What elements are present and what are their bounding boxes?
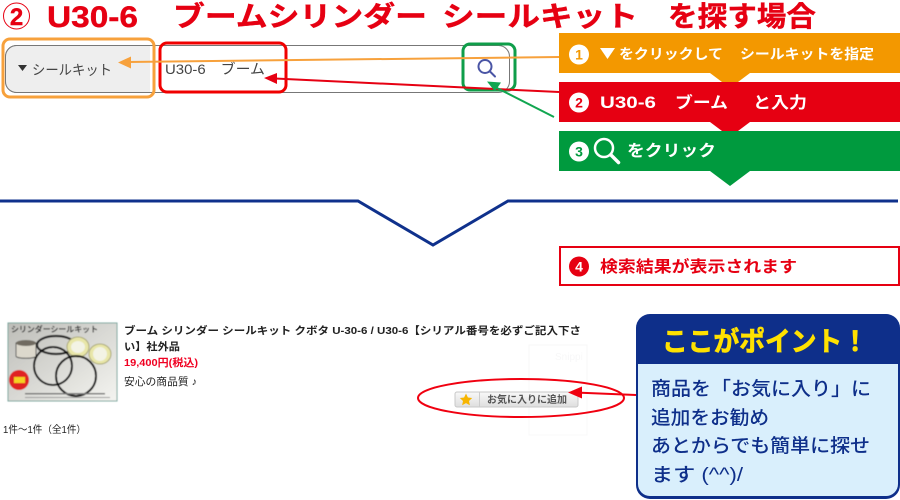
result count: 1件～1件（全1件） <box>3 423 86 436</box>
highlight: category box <box>3 39 154 97</box>
panel body text: ます (^^)/ <box>651 465 744 486</box>
step 1 banner: をクリックして <box>619 46 723 62</box>
product listing text: い】社外品 <box>124 340 180 353</box>
faint snipping tool ghost <box>529 345 587 435</box>
step 2 banner: 2 <box>575 94 583 110</box>
step 2 banner: と入力 <box>753 94 807 112</box>
price: 19,400円(税込) <box>124 356 198 369</box>
step 3 banner: をクリック <box>627 142 716 160</box>
faint snipping tool ghost: Snippi <box>555 352 583 363</box>
icon: magnifier <box>595 139 618 162</box>
panel heading: ここがポイント！ <box>662 326 868 357</box>
step 3 banner <box>559 131 900 186</box>
step 1 banner: 1 <box>575 46 583 62</box>
highlight: favorite button ellipse <box>418 379 624 417</box>
arrow: point panel to favorite button <box>568 386 636 398</box>
step 2 banner: ブーム <box>675 93 728 112</box>
highlight: search button box <box>463 44 515 90</box>
highlight: keyword box <box>160 43 286 92</box>
step 4 result banner <box>560 247 899 285</box>
product listing text <box>3 324 581 436</box>
title: U30-6 <box>47 1 138 34</box>
panel body text: 追加をお勧め <box>651 407 769 429</box>
title: ブームシリンダー <box>173 0 427 32</box>
product photo: シリンダーシールキット <box>11 324 98 334</box>
product name: ブーム シリンダー シールキット クボタ U-30-6 / U30-6【シリアル番号を必ずご記入下さ <box>124 324 581 337</box>
search button icon <box>478 60 495 76</box>
step 3 banner: 3 <box>575 144 583 160</box>
product photo <box>8 323 117 401</box>
arrow: step 1 to category <box>118 56 559 68</box>
panel: point callout <box>636 314 900 499</box>
title: を探す場合 <box>668 1 816 32</box>
arrow: step 2 to keyword <box>264 73 559 92</box>
step 2 banner: U30-6 <box>600 93 656 112</box>
title <box>4 0 816 34</box>
panel body text <box>651 378 871 486</box>
search bar <box>6 46 510 92</box>
panel body text: 商品を「お気に入り」に <box>651 378 871 400</box>
divider with downward chevron <box>0 201 898 245</box>
arrow: step 3 to search button <box>487 82 554 117</box>
panel body text: あとからでも簡単に探せ <box>651 435 870 457</box>
step 1 banner: シールキットを指定 <box>740 46 874 62</box>
title: 2 <box>10 4 23 31</box>
step 4 result banner: 検索結果が表示されます <box>600 257 797 276</box>
step 4 result banner: 4 <box>575 258 583 274</box>
favorite button <box>455 392 578 407</box>
search input text: U30-6 ブーム <box>165 61 265 77</box>
comment: 安心の商品質 ♪ <box>124 375 197 388</box>
category dropdown label: シールキット <box>32 62 112 78</box>
step 2 banner <box>559 82 900 137</box>
title: シールキット <box>442 1 638 32</box>
favorite button: お気に入りに追加 <box>487 393 567 406</box>
step 1 banner <box>559 33 900 88</box>
